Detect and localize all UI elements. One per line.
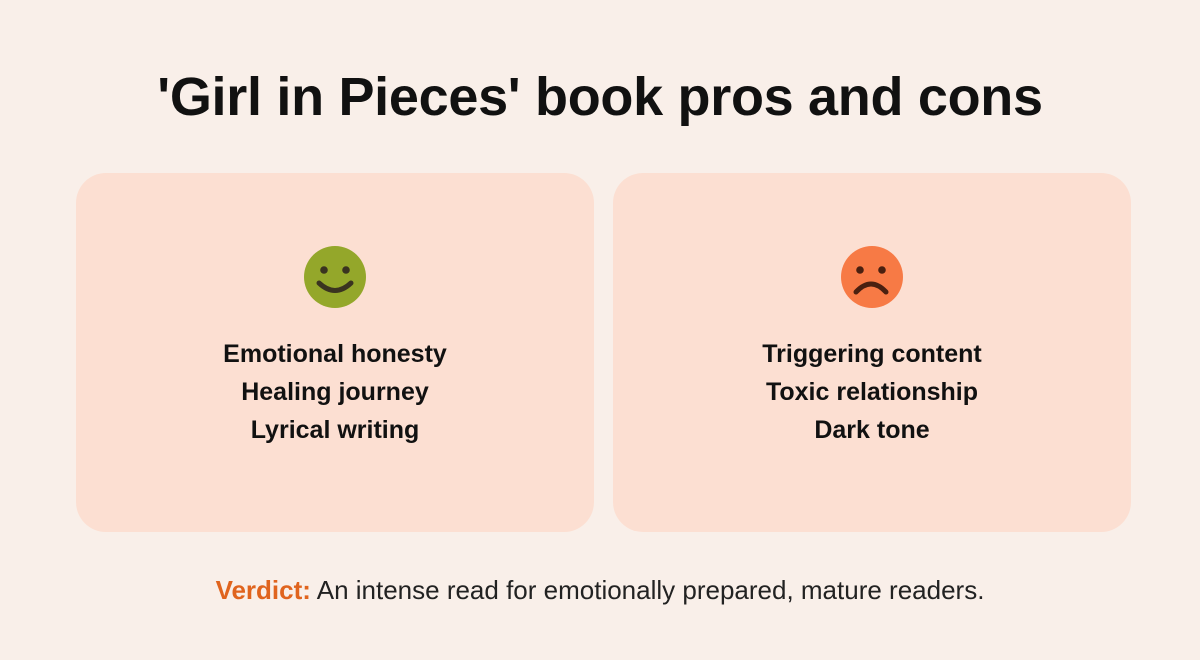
cons list: Triggering content — [762, 340, 982, 368]
icon: smiley — [304, 246, 366, 308]
pros list: Lyrical writing — [251, 416, 419, 444]
panel: cons — [613, 173, 1131, 532]
verdict: Verdict: An intense read for emotionally prepared, mature readers. — [216, 575, 984, 605]
pros list — [223, 340, 447, 444]
cons list: Dark tone — [814, 416, 930, 444]
cons list: Toxic relationship — [766, 378, 978, 406]
panel: pros — [76, 173, 594, 532]
icon: frown — [841, 246, 903, 308]
pros list: Healing journey — [241, 378, 429, 406]
title: 'Girl in Pieces' book pros and cons — [157, 67, 1043, 127]
cons list — [762, 340, 982, 444]
pros list: Emotional honesty — [223, 340, 447, 368]
